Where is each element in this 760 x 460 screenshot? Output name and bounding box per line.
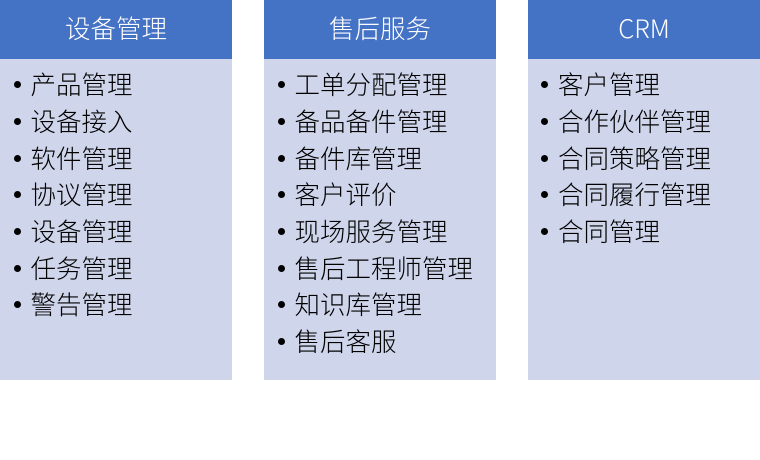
list item: 合同策略管理	[558, 138, 711, 176]
list item: 现场服务管理	[294, 212, 448, 249]
list item: 工单分配管理	[294, 65, 448, 102]
list item: 任务管理	[30, 248, 133, 286]
panel: CRM	[528, 0, 760, 380]
panel: 设备管理	[0, 0, 232, 380]
list item: 软件管理	[30, 138, 133, 176]
list item: 备件库管理	[294, 138, 422, 176]
list item: 产品管理	[30, 65, 133, 102]
list item: 备品备件管理	[294, 102, 448, 139]
heading: CRM: CRM	[618, 9, 670, 46]
list item: 协议管理	[30, 175, 133, 212]
list item: 合同管理	[558, 212, 660, 249]
list item: 合作伙伴管理	[558, 102, 711, 139]
panel: 售后服务	[264, 0, 496, 380]
list item: 合同履行管理	[558, 175, 711, 212]
heading: 售后服务: 售后服务	[329, 9, 431, 46]
heading: CRM	[528, 0, 760, 59]
list item: 客户评价	[294, 175, 397, 212]
heading: 设备管理: 设备管理	[65, 9, 167, 46]
list item: 设备管理	[30, 212, 133, 249]
list item: 知识库管理	[294, 285, 422, 322]
list item: 售后客服	[294, 322, 397, 359]
list item: 警告管理	[30, 285, 133, 322]
list item: 设备接入	[30, 102, 133, 139]
list item: 售后工程师管理	[294, 248, 473, 286]
heading: 售后服务	[264, 0, 496, 59]
list item: 客户管理	[558, 65, 660, 102]
heading: 设备管理	[0, 0, 232, 59]
